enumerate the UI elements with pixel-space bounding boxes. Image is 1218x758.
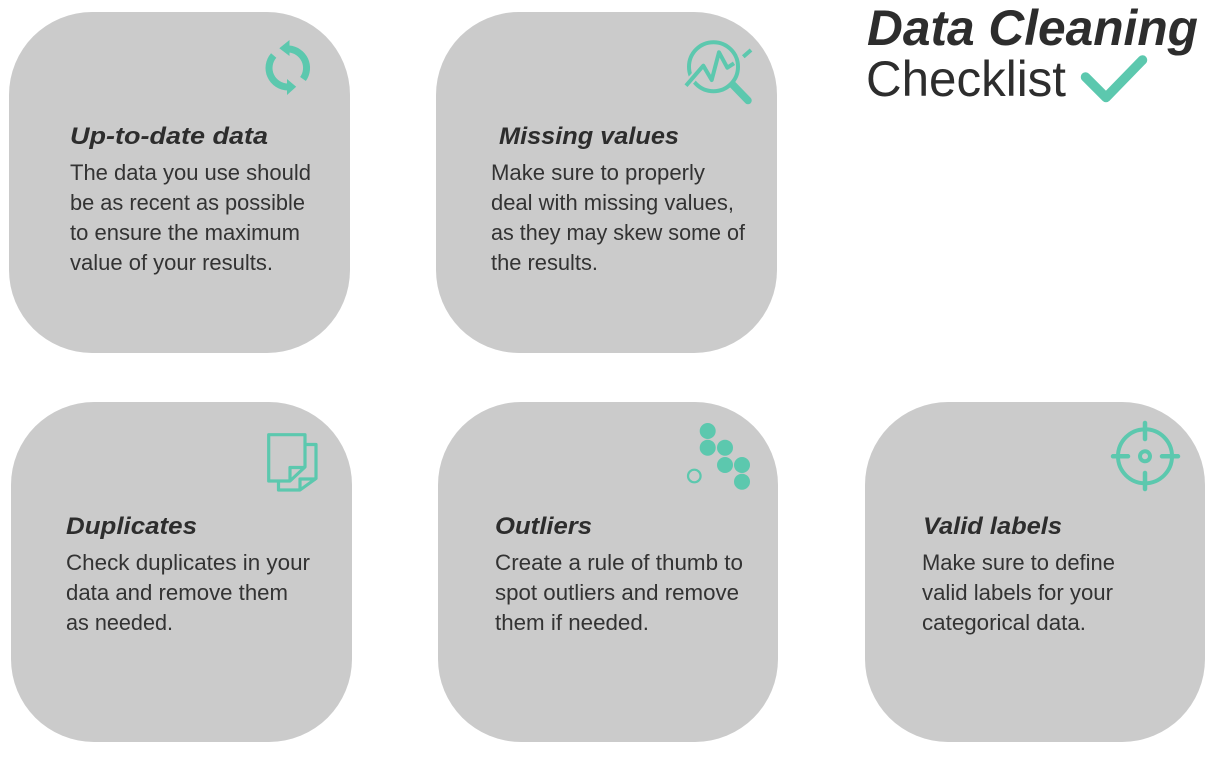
text block: them if needed.: [495, 610, 649, 635]
icon: target crosshair: [1113, 423, 1178, 489]
text block: [70, 160, 311, 275]
text block: deal with missing values,: [491, 190, 734, 215]
panel: outliers: [438, 402, 778, 742]
text block: data and remove them: [66, 580, 288, 605]
text block: [922, 550, 1115, 635]
title: Data Cleaning: [867, 0, 1198, 56]
text block: [495, 550, 743, 635]
heading: Missing values: [499, 123, 679, 150]
text block: value of your results.: [70, 250, 273, 275]
text block: as needed.: [66, 610, 173, 635]
text block: Make sure to define: [922, 550, 1115, 575]
heading: Duplicates: [66, 513, 197, 540]
text block: [491, 160, 746, 275]
text block: valid labels for your: [922, 580, 1113, 605]
icon: refresh arrows: [269, 40, 307, 95]
text block: categorical data.: [922, 610, 1086, 635]
icon: duplicate documents: [269, 435, 316, 490]
text block: to ensure the maximum: [70, 220, 300, 245]
icon: scatter dots with outlier: [688, 423, 750, 490]
heading: Up-to-date data: [70, 123, 268, 150]
text block: Check duplicates in your: [66, 550, 310, 575]
title: Checklist: [866, 51, 1066, 107]
text block: as they may skew some of: [491, 220, 746, 245]
icon: check mark: [1086, 60, 1142, 98]
panel: valid labels: [865, 402, 1205, 742]
panel: up-to-date data: [9, 12, 350, 353]
text block: Create a rule of thumb to: [495, 550, 743, 575]
text block: Make sure to properly: [491, 160, 705, 185]
text block: The data you use should: [70, 160, 311, 185]
heading: Outliers: [495, 513, 592, 540]
text block: [66, 550, 310, 635]
heading: Valid labels: [923, 513, 1062, 540]
title: [866, 0, 1198, 107]
icon: magnifier with line chart: [683, 42, 755, 100]
text block: be as recent as possible: [70, 190, 305, 215]
panel: missing values: [436, 12, 777, 353]
text block: spot outliers and remove: [495, 580, 739, 605]
panel: duplicates: [11, 402, 352, 742]
text block: the results.: [491, 250, 598, 275]
